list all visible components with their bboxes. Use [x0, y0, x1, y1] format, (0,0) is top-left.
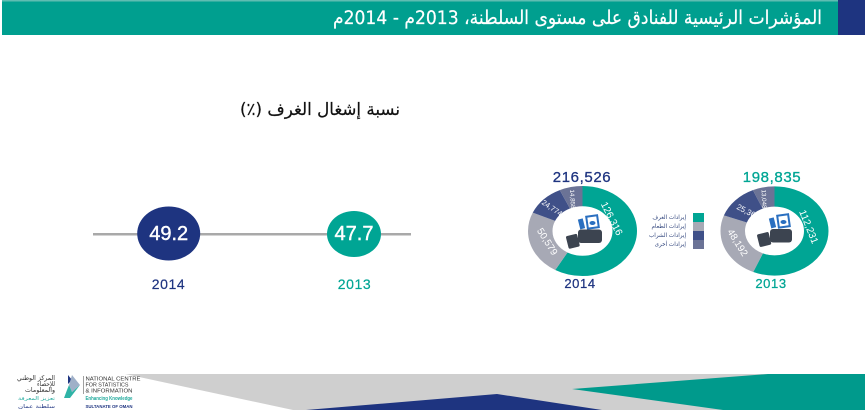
logo english name: SULTANATE OF OMAN: [86, 404, 133, 409]
legend swatches: [693, 213, 704, 249]
donut values 2014: 14,858: [568, 189, 576, 209]
panel: room occupancy: [93, 100, 411, 292]
logo arabic name: سلطنة عمان: [18, 404, 55, 410]
year 2013: 2013: [338, 276, 371, 292]
logo arabic name: تعزيز المعرفة: [18, 396, 56, 402]
donut values 2013: 48,192: [724, 227, 750, 259]
donut values 2013: [724, 189, 820, 259]
year label 2014: 2014: [564, 276, 596, 291]
logo english name: NATIONAL CENTRE: [86, 376, 141, 382]
total 2013: 198,835: [743, 169, 801, 186]
donut chart 2014: [534, 169, 625, 291]
logo english name: Enhancing Knowledge: [86, 396, 133, 402]
donut values 2014: 126,316: [598, 200, 624, 238]
logo english name: & INFORMATION: [86, 388, 132, 394]
year 2014: 2014: [152, 276, 185, 292]
legend: [649, 213, 704, 249]
logo arabic name: المركز الوطني: [17, 374, 55, 382]
legend labels: إيرادات أخرى: [655, 240, 686, 248]
donut values 2014: 50,579: [534, 226, 559, 258]
donut values 2014: 24,774: [540, 198, 564, 218]
logo: national centre for statistics and information: [17, 374, 141, 410]
logo arabic name: [17, 374, 56, 410]
timeline line: [93, 233, 411, 236]
legend labels: إيرادات الطعام: [651, 224, 686, 230]
marker 2013: [327, 211, 381, 257]
marker 2013: 47.7: [335, 223, 373, 245]
logo english name: [86, 376, 141, 409]
logo english name: FOR STATISTICS: [86, 382, 129, 388]
logo mark: [64, 375, 80, 398]
header band: [2, 0, 865, 35]
title: المؤشرات الرئيسية للفنادق على مستوى السلطنة، 2013م - 2014م: [333, 7, 822, 29]
logo arabic name: للإحصاء: [37, 380, 55, 388]
donut chart 2013: [724, 169, 820, 291]
legend labels: [649, 215, 686, 248]
legend labels: إيرادات الغرف: [652, 215, 686, 221]
donut values 2014: [534, 189, 624, 258]
legend labels: إيرادات الشراب: [649, 233, 686, 239]
logo arabic name: والمعلومات: [25, 386, 55, 394]
icon: wallet and banknotes 2014: [566, 214, 602, 249]
icon: wallet and banknotes 2013: [757, 213, 792, 247]
donut values 2013: 112,231: [796, 209, 820, 246]
marker 2014: 49.2: [149, 223, 188, 245]
occupancy heading: نسبة إشغال الغرف (٪): [240, 100, 400, 120]
donut values 2013: 25,365: [735, 202, 761, 222]
year label 2013: 2013: [755, 276, 787, 291]
donut rings 2013: [733, 197, 816, 265]
donut rings 2014: [540, 196, 625, 266]
marker 2014: [137, 206, 200, 260]
footer shapes: [125, 374, 865, 410]
donut values 2013: 13,048: [760, 189, 767, 209]
total 2014: 216,526: [553, 169, 611, 186]
